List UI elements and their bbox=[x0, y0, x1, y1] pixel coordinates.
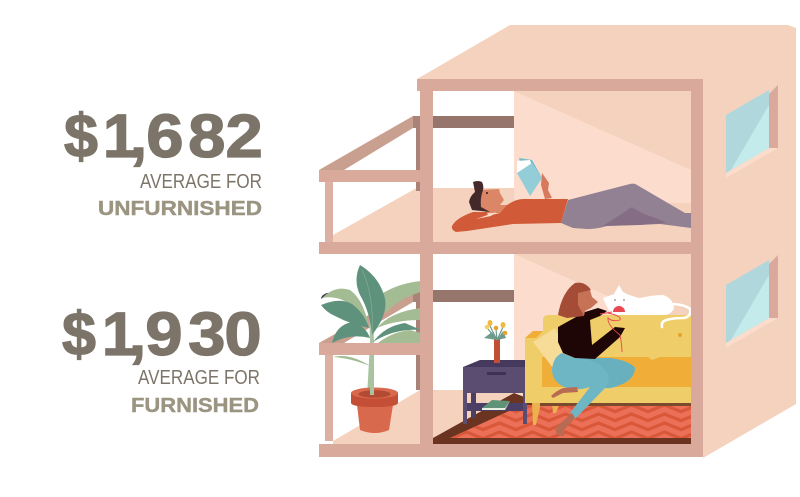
caption: unfurnished: UNFURNISHED bbox=[98, 197, 262, 220]
hair bbox=[558, 283, 591, 318]
building shell: roof and side wall bbox=[417, 25, 796, 458]
price: $1,930: 1, bbox=[102, 300, 146, 368]
legs bbox=[552, 353, 635, 419]
stem below rail and pot bbox=[351, 355, 398, 433]
structural frame bbox=[417, 79, 703, 457]
balcony floor beams bbox=[319, 242, 421, 457]
book bbox=[517, 158, 542, 196]
caption: average for: AVERAGE FOR bbox=[138, 366, 260, 389]
lower room interior bbox=[433, 254, 691, 445]
stem bbox=[369, 300, 372, 397]
cat with yarn bbox=[603, 285, 690, 327]
yarn thread bbox=[600, 312, 622, 352]
sofa bbox=[525, 315, 691, 425]
book on shelf bbox=[482, 400, 510, 410]
price: $1,930: 930 bbox=[145, 300, 262, 368]
lower balcony back structure bbox=[319, 290, 421, 445]
upper side window bbox=[726, 85, 778, 178]
upper balcony bbox=[319, 116, 421, 243]
price: $1,682: $ bbox=[64, 102, 98, 170]
neck and face bbox=[478, 189, 510, 213]
price: $1,930: $ bbox=[62, 300, 96, 368]
legs bbox=[561, 184, 691, 229]
foot, on rug bbox=[555, 413, 575, 436]
price: $1,930 bbox=[62, 300, 262, 368]
eye bbox=[486, 192, 488, 194]
infographic canvas bbox=[62, 25, 796, 458]
sweater bbox=[558, 308, 625, 359]
forearm and hand bbox=[541, 173, 552, 199]
price: $1,682 bbox=[64, 102, 263, 170]
man reading bbox=[452, 158, 691, 232]
face bbox=[577, 290, 598, 316]
caption: furnished: FURNISHED bbox=[131, 394, 259, 417]
shirt bbox=[452, 199, 568, 232]
nightstand bbox=[463, 360, 527, 424]
pot rim bbox=[351, 393, 398, 407]
text block: unfurnished price bbox=[64, 102, 263, 220]
upper room interior bbox=[433, 91, 691, 243]
hair bbox=[469, 181, 490, 212]
potted plant bbox=[321, 265, 421, 397]
price: $1,682: 682 bbox=[146, 102, 263, 170]
foot, raised bbox=[551, 387, 578, 398]
caption: average for: AVERAGE FOR bbox=[140, 170, 262, 193]
woman knitting bbox=[551, 283, 635, 436]
lower side window bbox=[726, 255, 778, 348]
text block: furnished price bbox=[62, 300, 262, 417]
pot body bbox=[357, 405, 393, 433]
vase with flowers bbox=[484, 320, 507, 363]
balcony rail and post, lower bbox=[319, 343, 421, 441]
rug bbox=[433, 393, 691, 444]
price: $1,682: 1, bbox=[103, 102, 147, 170]
